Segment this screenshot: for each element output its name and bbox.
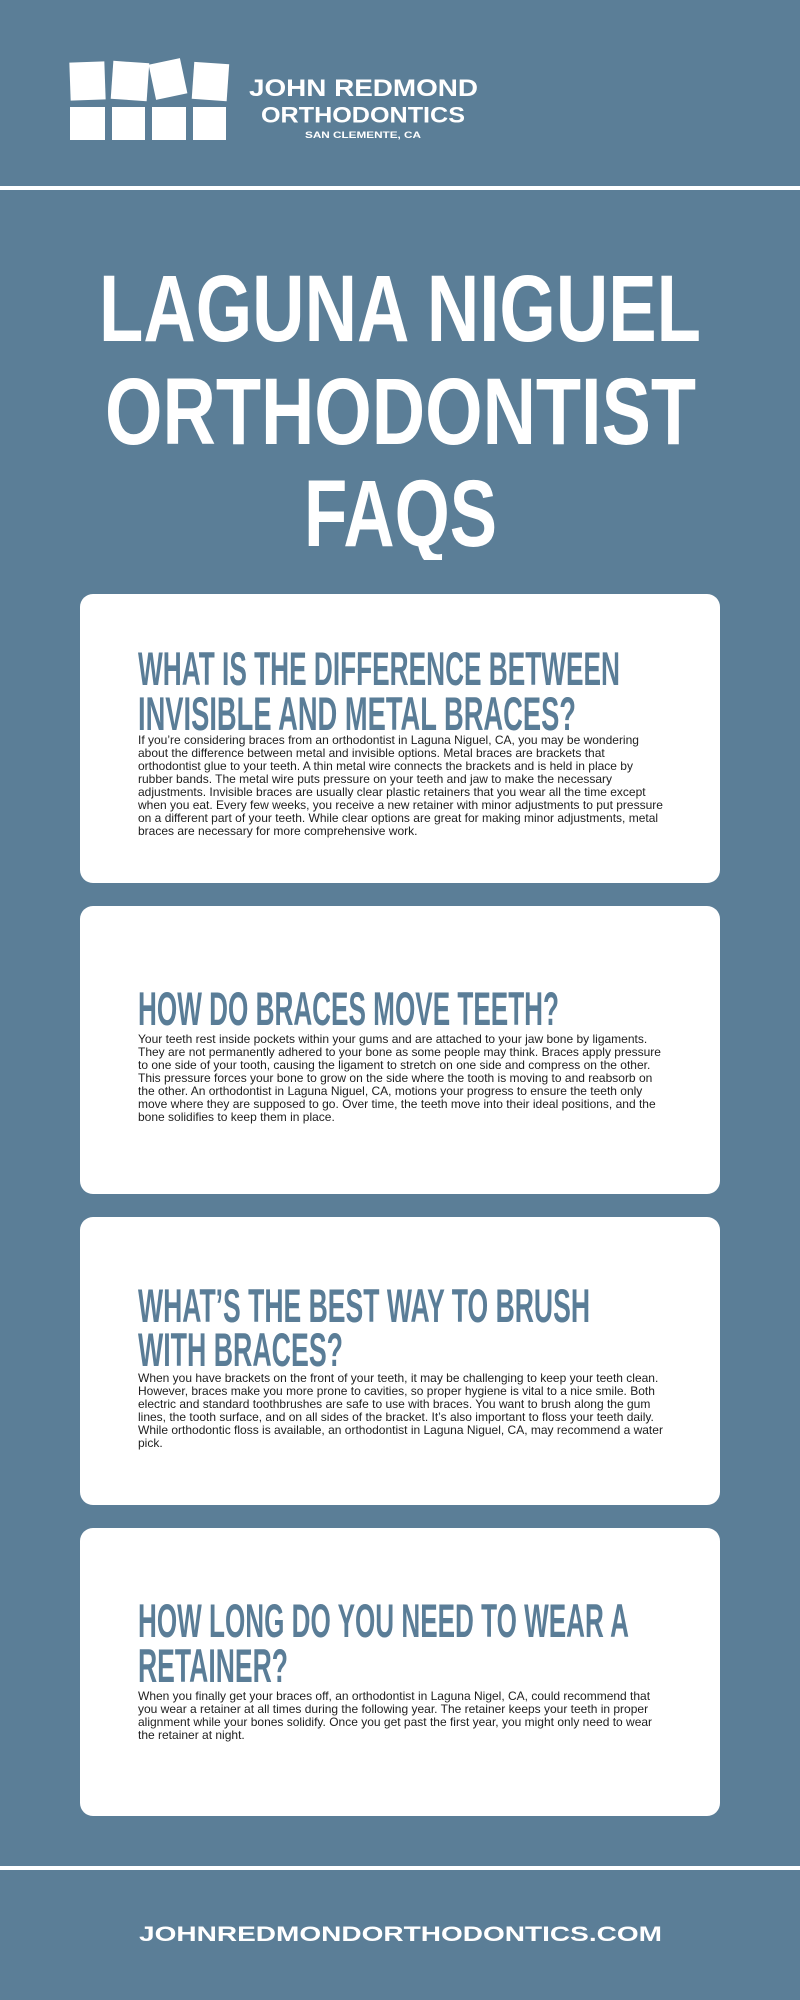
panel: invisible vs metal braces [80, 594, 720, 883]
icon: logo squares [69, 58, 229, 140]
text: card 2 body: move where they are supposed to go. Over time, the teeth move into their ideal positions, and the [138, 1097, 656, 1111]
text: card 2 body: bone solidifies to keep them in place. [138, 1110, 335, 1124]
text: card 4 body: When you finally get your braces off, an orthodontist in Laguna Nigel, CA, could recommend that [138, 1689, 650, 1703]
title [99, 260, 701, 560]
text: card 2 body [138, 1032, 661, 1124]
heading: card 3: WITH BRACES? [138, 1323, 343, 1376]
heading: card 1 [138, 642, 620, 740]
text: card 4 body [138, 1689, 652, 1742]
logo text: JOHN REDMOND [249, 75, 478, 102]
text: card 1 body: braces are necessary for more comprehensive work. [138, 824, 417, 838]
heading: card 3 [138, 1279, 590, 1376]
text: card 2 body: to one side of your tooth, causing the ligament to stretch on one side and compress on the other. [138, 1058, 650, 1072]
heading: card 4 [138, 1594, 629, 1692]
text: card 1 body: about the difference between metal and invisible options. Metal braces are brackets that [138, 746, 605, 760]
text: card 4 body: you wear a retainer at all times during the following year. The retainer keeps your teeth in proper [138, 1702, 648, 1716]
text: card 1 body: on a different part of your teeth. While clear options are great for making minor adjustments, metal [138, 811, 658, 825]
text: card 2 body: This pressure forces your bone to grow on the side where the tooth is moving to and reabsorb on [138, 1071, 652, 1085]
text: card 2 body: Your teeth rest inside pockets within your gums and are attached to your jaw bone by ligaments. [138, 1032, 647, 1046]
text: card 2 body: They are not permanently adhered to your bone as some people may think. Braces apply pressure [138, 1045, 661, 1059]
text: card 1 body: adjustments. Invisible braces are usually clear plastic retainers that you wear all the time except [138, 785, 646, 799]
text: card 3 body [138, 1371, 663, 1450]
text: card 3 body: When you have brackets on the front of your teeth, it may be challenging to keep your teeth clean. [138, 1371, 658, 1385]
footer url: JOHNREDMONDORTHODONTICS.COM [139, 1923, 662, 1946]
text: card 1 body: rubber bands. The metal wire puts pressure on your teeth and jaw to make the necessary [138, 772, 612, 786]
text: card 2 body: the other. An orthodontist in Laguna Niguel, CA, motions your progress to ensure the teeth only [138, 1084, 642, 1098]
logo text [249, 75, 478, 141]
text: card 1 body [138, 733, 663, 838]
text: card 3 body: lines, the tooth surface, and on all sides of the bracket. It’s also important to floss your teeth daily. [138, 1410, 654, 1424]
text: card 4 body: the retainer at night. [138, 1728, 245, 1742]
text: card 1 body: If you’re considering braces from an orthodontist in Laguna Niguel, CA, you may be wondering [138, 733, 639, 747]
text: card 4 body: alignment while your bones solidify. Once you get past the first year, you might only need to wear [138, 1715, 652, 1729]
logo [69, 58, 478, 141]
text: card 3 body: While orthodontic floss is available, an orthodontist in Laguna Niguel, CA, may recommend a water [138, 1423, 663, 1437]
text: card 3 body: electric and standard toothbrushes are safe to use with braces. You want to brush along the gum [138, 1397, 650, 1411]
panel: brushing with braces [80, 1217, 720, 1505]
text: card 1 body: when you eat. Every few weeks, you receive a new retainer with minor adjustments to put pressure [138, 798, 663, 812]
panel: how braces move teeth [80, 906, 720, 1194]
text: card 3 body: pick. [138, 1436, 163, 1450]
text: card 1 body: orthodontist glue to your teeth. A thin metal wire connects the brackets and is held in place by [138, 759, 633, 773]
heading: card 4: RETAINER? [138, 1639, 288, 1692]
text: card 3 body: However, braces make you more prone to cavities, so proper hygiene is vital to a nice smile. Both [138, 1384, 655, 1398]
panel: retainer duration [80, 1528, 720, 1816]
logo text: SAN CLEMENTE, CA [305, 130, 421, 141]
logo text: ORTHODONTICS [261, 103, 465, 128]
